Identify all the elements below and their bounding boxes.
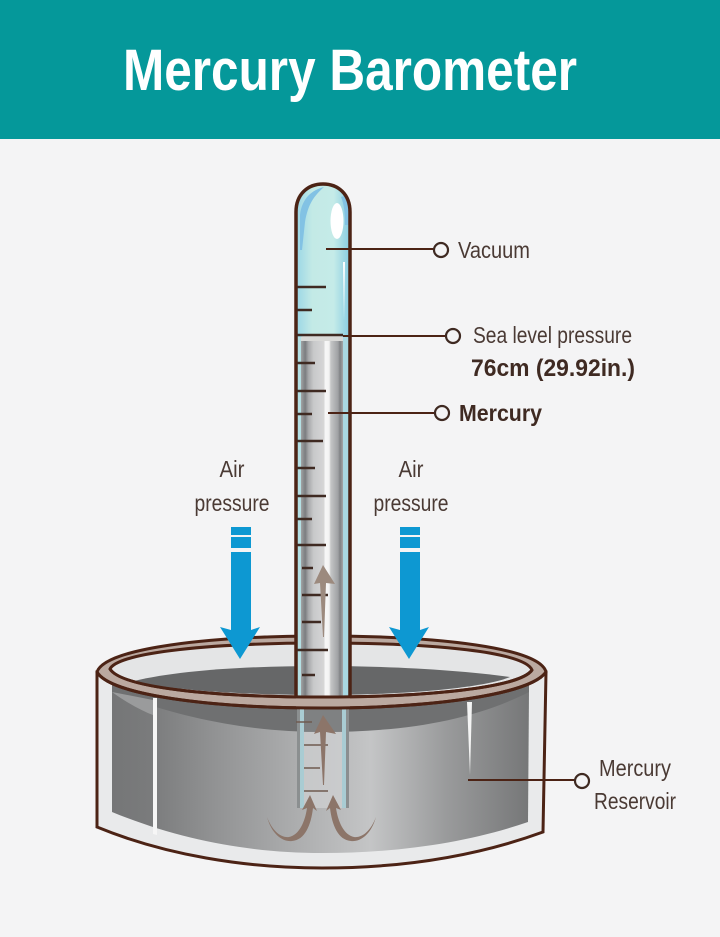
dish body (97, 672, 546, 868)
title: Mercury Barometer (123, 38, 577, 103)
vacuum glass (296, 184, 350, 696)
title banner (0, 0, 720, 139)
tube outline (296, 184, 350, 697)
front rim band over tube (296, 696, 350, 708)
barometer tube (296, 184, 350, 697)
right air pressure label (374, 456, 448, 516)
callout: mercury: Mercury (459, 400, 542, 426)
right air pressure label: Air (398, 456, 424, 482)
submerged tube (267, 708, 376, 841)
mercury surface (134, 666, 510, 695)
left air pressure label: pressure (194, 490, 270, 516)
mercury column (301, 337, 343, 696)
left air pressure label: Air (220, 456, 245, 482)
left air pressure label (194, 456, 270, 516)
arrow: left inflow (267, 795, 317, 841)
callout: mercury reservoir: Mercury (599, 755, 671, 781)
callout: sea level pressure (343, 322, 635, 382)
callout: mercury reservoir: Reservoir (594, 788, 676, 814)
left air pressure arrow (220, 527, 260, 659)
callout: mercury reservoir (468, 755, 676, 814)
rim (97, 636, 546, 708)
callout: vacuum: Vacuum (458, 237, 530, 263)
arrow: rising mercury in tube (314, 565, 335, 637)
mercury reservoir dish (97, 636, 546, 868)
callout: mercury (328, 400, 542, 426)
arrow: right inflow (326, 795, 376, 841)
callout: vacuum (326, 237, 530, 263)
right air pressure arrow (389, 527, 429, 659)
callout: sea level pressure: Sea level pressure (473, 322, 632, 348)
scale ticks (297, 287, 343, 675)
arrow: rising mercury in reservoir (314, 715, 336, 785)
callout: sea level pressure: 76cm (29.92in.) (471, 355, 635, 382)
right air pressure label: pressure (374, 490, 448, 516)
